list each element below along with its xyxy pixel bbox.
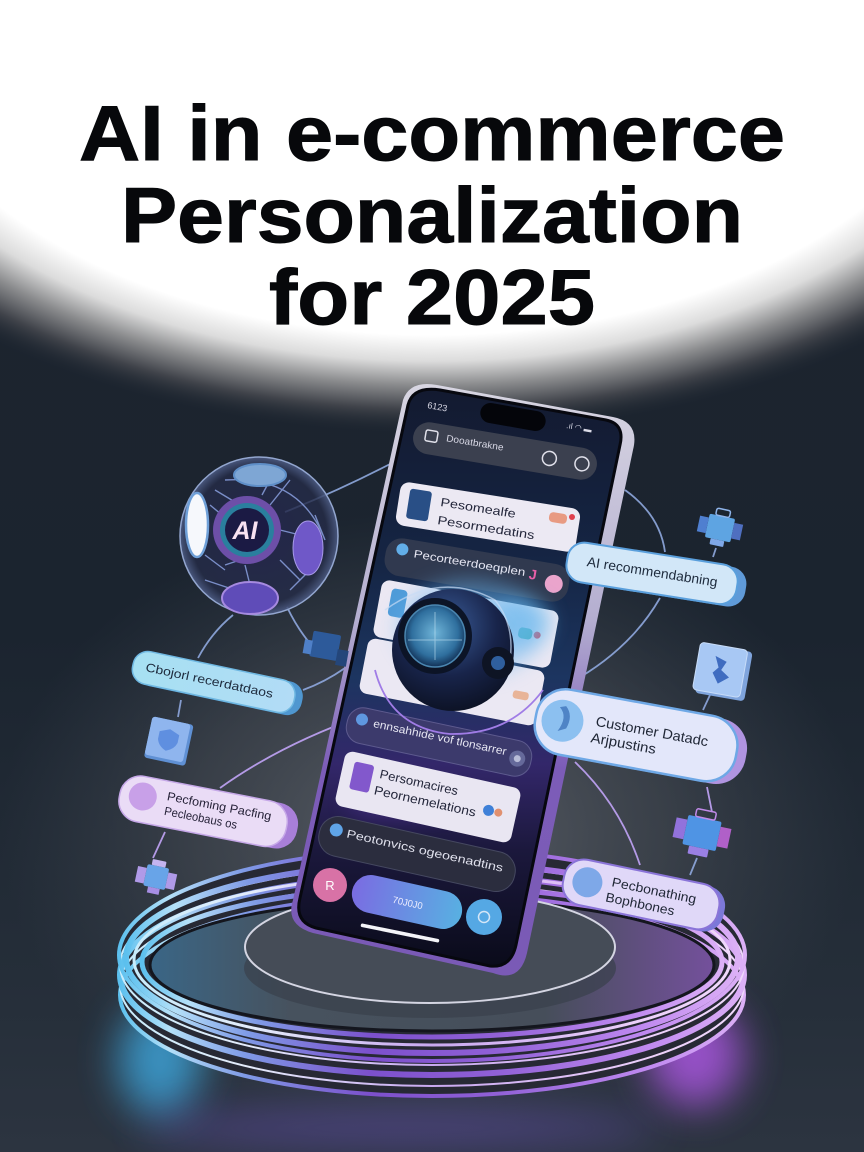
status bar: .ıl ◠ ▬ bbox=[566, 421, 592, 434]
card 4: Peornemelations bbox=[373, 783, 477, 820]
pill: personalizing: Bophbones bbox=[604, 889, 676, 918]
phone body bbox=[291, 384, 634, 976]
pill: coupon recommendations bbox=[129, 649, 306, 718]
icon: camera right lower bbox=[670, 805, 734, 861]
status bar bbox=[427, 400, 592, 434]
icon: tile right bbox=[692, 642, 753, 701]
search bar: Dooatbrakne bbox=[445, 433, 504, 454]
icon: camera top right bbox=[695, 505, 745, 550]
banner 3: Peotonvics ogeoenadtins bbox=[345, 828, 504, 875]
status bar: 6123 bbox=[427, 400, 448, 413]
card 4 bbox=[334, 750, 522, 844]
pill: performing pacing: Pecfoming Pacfing bbox=[166, 789, 273, 823]
connector lines bbox=[178, 463, 716, 875]
pill: AI recommendation bbox=[564, 540, 749, 609]
card 2 bbox=[372, 579, 560, 669]
banner 2: ennsahhide vof tlonsarrer bbox=[372, 718, 508, 758]
title: Personalization bbox=[121, 171, 743, 259]
banner 3 bbox=[315, 813, 519, 895]
banner 1: J bbox=[528, 566, 538, 583]
banner 2 bbox=[343, 705, 535, 779]
card 3 bbox=[358, 637, 546, 727]
card 1: Pesormedatins bbox=[437, 513, 536, 542]
AI label: AI bbox=[232, 517, 259, 545]
banner 1 bbox=[382, 536, 572, 604]
connector lines lilac bbox=[153, 716, 712, 865]
glowing ring platform bbox=[118, 849, 745, 1148]
card 1: Pesomealfe bbox=[440, 495, 517, 521]
action buttons bbox=[313, 868, 502, 943]
pill: personalizing bbox=[559, 856, 729, 935]
pill: coupon recommendations: Cbojorl recerdatdaos bbox=[144, 660, 274, 701]
pill: performing pacing: Pecleobaus os bbox=[163, 804, 238, 832]
search bar bbox=[411, 420, 599, 482]
card 4: Persomacires bbox=[378, 767, 459, 798]
title bbox=[79, 89, 785, 341]
pill: customer data bbox=[530, 684, 752, 789]
central orb bbox=[375, 580, 543, 734]
AI sphere bbox=[180, 457, 338, 615]
card 1 bbox=[395, 481, 581, 553]
phone glow and accents bbox=[345, 598, 550, 819]
icon: camera center left bbox=[302, 629, 351, 667]
title: AI in e-commerce bbox=[79, 89, 785, 177]
phone screen bbox=[299, 389, 621, 966]
pill: personalizing: Pecbonathing bbox=[611, 874, 698, 907]
icon: camera bottom left bbox=[133, 856, 179, 898]
action buttons: 70J0J0 bbox=[391, 895, 424, 912]
banner 1: Pecorteerdoeqplen bbox=[413, 548, 526, 579]
action buttons: R bbox=[325, 878, 335, 893]
icon: shield tile left bbox=[144, 716, 194, 766]
phone bbox=[291, 384, 634, 976]
title: for 2025 bbox=[269, 253, 595, 341]
pill: customer data: Customer Datadc bbox=[595, 713, 710, 749]
pill: performing pacing bbox=[115, 772, 302, 852]
pill: customer data: Arjpustins bbox=[590, 729, 657, 757]
pill: AI recommendation: AI recommendabning bbox=[586, 554, 719, 590]
